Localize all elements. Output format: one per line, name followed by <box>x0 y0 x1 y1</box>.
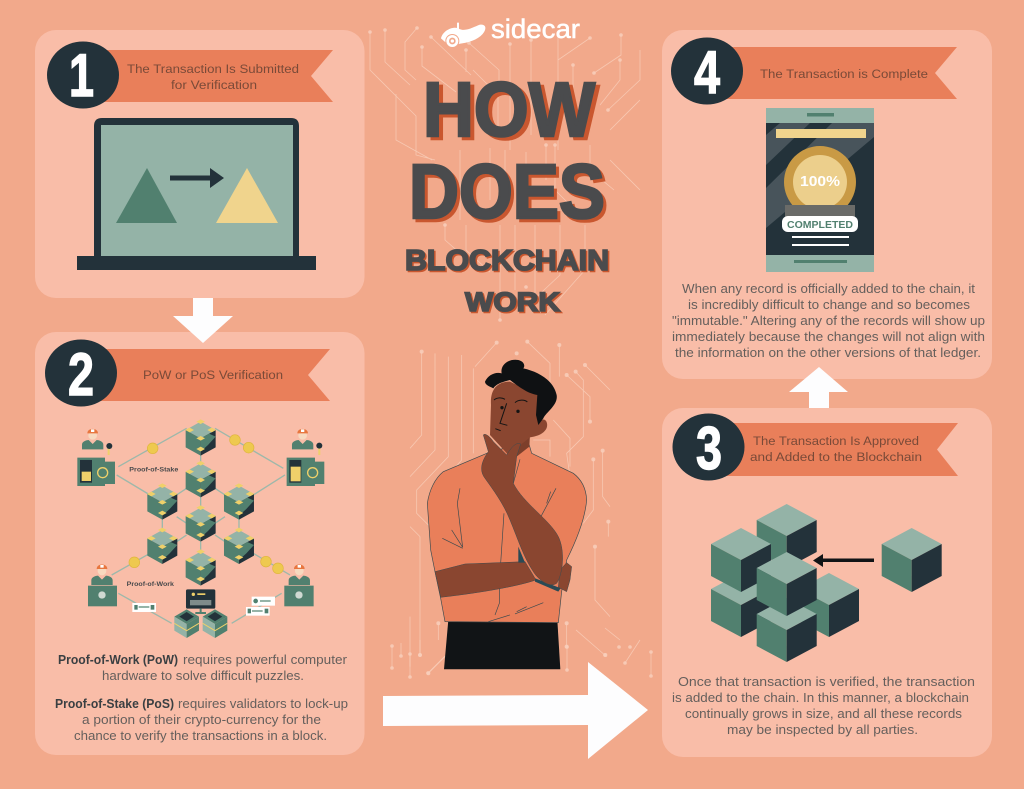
ribbon text: step 3: The Transaction Is Approved <box>753 434 919 448</box>
arrow: block joins chain <box>813 554 874 567</box>
label: proof-of-stake: Proof-of-Stake <box>129 468 179 474</box>
text: step 4 description: immediately because the changes will not align with <box>672 330 985 344</box>
transaction cards <box>132 597 275 616</box>
icon: phone showing completed: COMPLETED <box>787 220 853 231</box>
trousers <box>444 620 560 669</box>
text: proof of stake: Proof-of-Stake (PoS) <box>55 697 174 711</box>
neck <box>507 435 530 457</box>
number badge 1: 1 <box>69 42 94 109</box>
text: step 3 description: continually grows in size, and all these records <box>685 707 962 721</box>
text: proof of stake: a portion of their crypto-currency for the <box>82 713 321 727</box>
text: step 4 description <box>672 282 985 360</box>
text: step 4 description: the information on the other versions of that ledger. <box>675 346 981 360</box>
title: how does blockchain work: DOES <box>409 149 605 235</box>
face <box>490 382 547 457</box>
title: how does blockchain work: HOW <box>427 70 599 156</box>
label: proof-of-work: Proof-of-Work <box>127 582 175 588</box>
text: proof of work: Proof-of-Work (PoW) <box>58 653 178 667</box>
icon: cube cluster <box>711 504 859 662</box>
circuit lines behind person <box>410 340 610 675</box>
ribbon text: step 1: The Transaction Is Submitted <box>127 62 299 76</box>
title: how does blockchain work: WORK <box>465 287 561 317</box>
raised arm <box>482 434 563 585</box>
hair <box>485 360 557 425</box>
icon: phone showing completed: 100% <box>800 174 840 190</box>
ribbon text: step 2: PoW or PoS Verification <box>143 368 283 382</box>
number badge 3: 3 <box>696 415 722 482</box>
sleeve shadow <box>518 547 561 592</box>
number badge 2 <box>45 340 117 408</box>
ribbon: step 2 <box>98 349 330 401</box>
icon: phone showing completed <box>766 108 874 272</box>
text: proof of work: hardware to solve difficult puzzles. <box>102 669 304 683</box>
panel: step 2 <box>35 332 364 755</box>
forearm <box>435 562 536 597</box>
title: how does blockchain work: BLOCKCHAIN <box>405 245 609 277</box>
number badge 4 <box>671 38 743 106</box>
text: step 3 description <box>672 675 975 737</box>
shirt creases <box>442 459 556 622</box>
circuit lines behind title <box>368 26 640 322</box>
ribbon text: step 4: The Transaction is Complete <box>760 67 928 81</box>
number badge 2: 2 <box>68 341 94 408</box>
logo: sidecar: sidecar <box>491 14 580 44</box>
number badge 1 <box>47 42 119 109</box>
title: how does blockchain work: DOES <box>412 152 608 238</box>
icon: laptop with triangles and arrow <box>77 118 316 270</box>
shirt <box>427 442 587 623</box>
title: how does blockchain work: HOW <box>423 67 595 153</box>
logo: sidecar <box>441 14 580 48</box>
text: step 3 description: is added to the chain. In this manner, a blockchain <box>672 691 969 705</box>
ribbon: step 1 <box>100 50 333 102</box>
arrow: to step 3 <box>383 662 648 759</box>
text: proof of work <box>58 653 347 683</box>
panel: step 4 <box>662 30 992 379</box>
text: proof of stake <box>55 697 348 743</box>
text: step 4 description: When any record is officially added to the chain, it <box>682 282 976 296</box>
text: step 4 description: "immutable." Altering any of the records will show up <box>672 314 985 328</box>
ribbon text: step 3: and Added to the Blockchain <box>750 450 922 464</box>
text: step 3 description: may be inspected by all parties. <box>727 723 918 737</box>
ribbon: step 3 <box>726 423 958 476</box>
title: how does blockchain work: BLOCKCHAIN <box>406 246 610 278</box>
title: how does blockchain work <box>405 67 610 318</box>
ribbon text: step 3 <box>750 434 922 464</box>
supporting hand <box>558 563 572 592</box>
ribbon text: step 1 <box>127 62 299 92</box>
ribbon text: step 1: for Verification <box>171 78 257 92</box>
panel: step 3 <box>662 408 992 757</box>
servers <box>174 609 227 638</box>
arrow: step 1 to step 2 <box>173 298 233 343</box>
number badge 4: 4 <box>694 39 720 106</box>
ribbon: step 4 <box>725 47 957 99</box>
text: step 3 description: Once that transaction is verified, the transaction <box>678 675 975 689</box>
diagram: proof-of-stake and proof-of-work network <box>77 419 324 638</box>
number badge 3 <box>672 414 744 482</box>
text: proof of work: requires powerful computer <box>183 653 347 667</box>
facial features <box>494 398 527 431</box>
circuit lines lower left of person <box>390 628 653 679</box>
monitor <box>186 589 215 613</box>
arrow: step 3 to step 4 <box>789 367 848 408</box>
title: how does blockchain work: WORK <box>466 288 562 318</box>
icon: new block <box>882 528 942 592</box>
text: proof of stake: chance to verify the transactions in a block. <box>74 729 327 743</box>
text: proof of stake: requires validators to lock-up <box>178 697 348 711</box>
text: step 4 description: is incredibly difficult to change and so becomes <box>688 298 970 312</box>
illustration: thinking man <box>427 360 587 669</box>
panel: step 1 <box>35 30 364 298</box>
